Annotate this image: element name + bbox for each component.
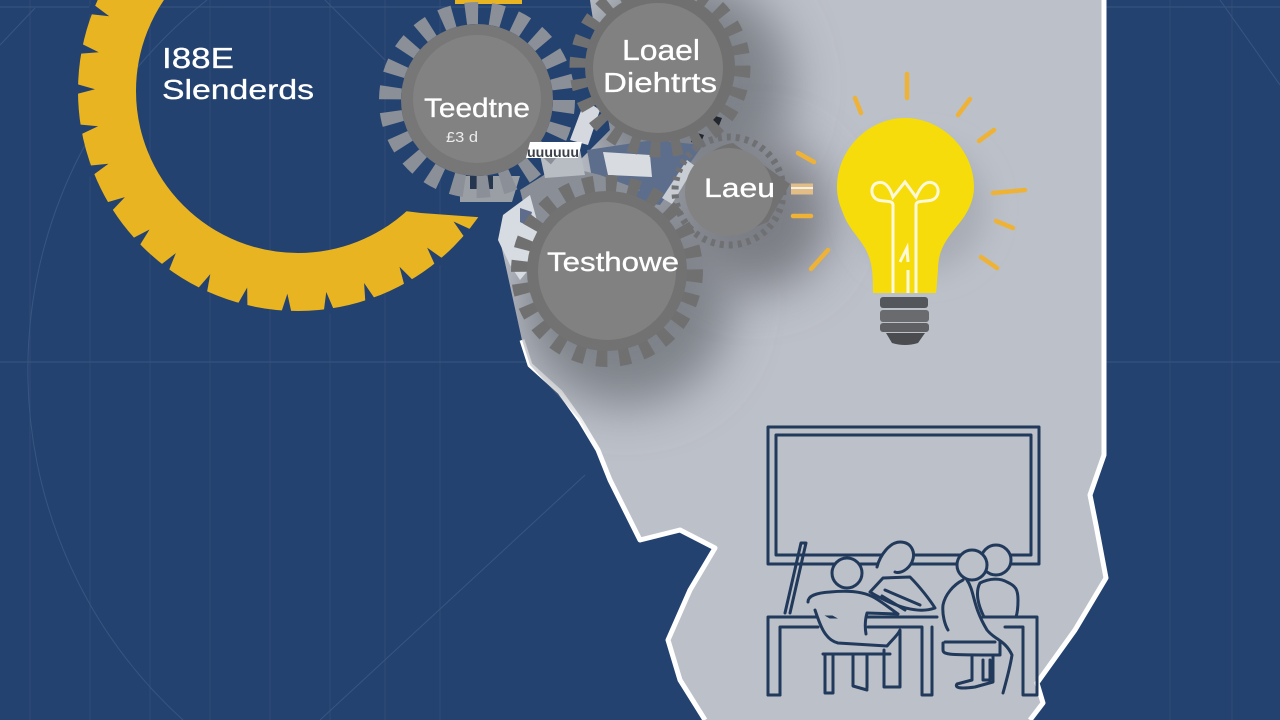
gear: Teedtne: £3 d — [446, 129, 478, 146]
bulb glass — [837, 118, 974, 293]
bulb screw base — [880, 297, 929, 345]
student left — [808, 558, 900, 693]
gear: Laeu — [675, 137, 790, 245]
light bulb icon — [791, 74, 1025, 345]
state map silhouette — [500, 0, 1106, 720]
gear: Local Districts — [578, 0, 742, 149]
blackboard — [768, 427, 1039, 564]
students right — [943, 545, 1018, 693]
filament — [872, 182, 938, 293]
label: ISBE standards: Slenderds — [162, 74, 314, 105]
gear: Testhowe — [520, 184, 694, 358]
gear: Local Districts: Loael — [622, 35, 700, 67]
gear: Teedtne: Teedtne — [424, 93, 530, 123]
label: ISBE standards — [162, 43, 314, 105]
student teacher leaning — [870, 542, 935, 610]
gold ISBE standards gear arc — [73, 0, 489, 316]
gear: Laeu: Laeu — [704, 173, 775, 203]
gear: Testhowe: Testhowe — [547, 247, 679, 277]
classroom line drawing — [768, 427, 1039, 695]
gear: Local Districts: Diehtrts — [603, 67, 717, 98]
small white ticks label: uuuuuu — [527, 144, 579, 160]
gear: Teedtne — [390, 13, 564, 187]
gear drop shadows on map — [519, 0, 986, 406]
desks and pointer — [768, 543, 1037, 695]
label: ISBE standards: I88E — [162, 43, 234, 75]
mechanical fragments between gears — [455, 0, 722, 280]
bulb rays — [791, 74, 1025, 269]
